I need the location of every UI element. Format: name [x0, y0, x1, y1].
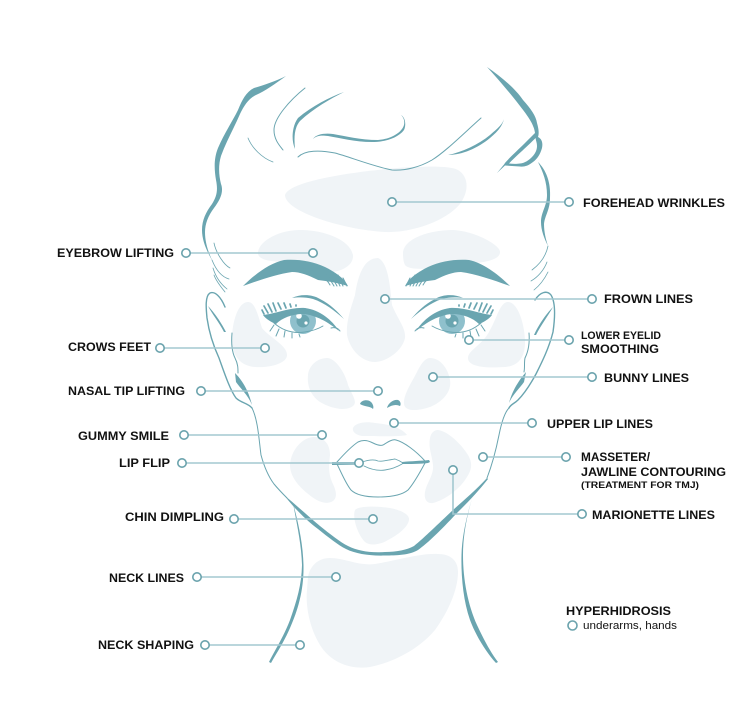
leader: crows feet: [156, 344, 269, 352]
leader: frown lines: [381, 295, 596, 303]
label: upper lip lines: UPPER LIP LINES: [547, 417, 653, 431]
icon: hyperhidrosis dot: [568, 621, 577, 630]
leader: bunny lines: [429, 373, 596, 381]
leader: eyebrow lifting: [182, 249, 317, 257]
label: forehead wrinkles: FOREHEAD WRINKLES: [583, 196, 725, 210]
label: neck lines: NECK LINES: [109, 571, 184, 585]
left neck: [269, 503, 304, 663]
label: masseter jawline contouring: [581, 450, 726, 491]
leader: marionette lines: [449, 466, 586, 518]
hair and head outline: [202, 67, 550, 292]
leader: gummy smile: [180, 431, 326, 439]
label: hyperhidrosis: HYPERHIDROSIS: [566, 604, 671, 618]
left ear: [206, 293, 252, 408]
leader: neck shaping: [201, 641, 304, 649]
patch: right lower cheek: [425, 430, 471, 503]
iris: [439, 308, 465, 334]
label: bunny lines: BUNNY LINES: [604, 371, 689, 385]
leader: masseter: [479, 453, 570, 461]
label: masseter jawline contouring: JAWLINE CONTOURING: [581, 465, 726, 479]
face outline: [206, 292, 555, 663]
label: underarms, hands: underarms, hands: [583, 620, 678, 632]
left eye: [262, 295, 344, 338]
label: eyebrow lifting: EYEBROW LIFTING: [57, 246, 174, 260]
leader: lip flip: [178, 459, 363, 467]
eyelids and lashes: [411, 295, 493, 338]
nostrils: [360, 400, 401, 409]
label: marionette lines: MARIONETTE LINES: [592, 508, 715, 522]
leader: chin dimpling: [230, 515, 377, 523]
leader: neck lines: [193, 573, 340, 581]
leader: forehead wrinkles: [388, 198, 573, 206]
label: masseter jawline contouring: (TREATMENT FOR TMJ): [581, 480, 699, 491]
right eyebrow: [405, 260, 510, 286]
leader: nasal tip lifting: [197, 387, 382, 395]
label: chin dimpling: CHIN DIMPLING: [125, 510, 224, 524]
leader: lower eyelid: [465, 336, 573, 344]
patch: right nasal: [404, 358, 450, 410]
label: lower eyelid smoothing: SMOOTHING: [581, 342, 659, 356]
label: lower eyelid smoothing: LOWER EYELID: [581, 330, 661, 342]
label: gummy smile: GUMMY SMILE: [78, 429, 169, 443]
left eyebrow: [243, 260, 348, 286]
patch: left brow: [258, 230, 353, 272]
patch: right crow's feet: [468, 302, 525, 367]
eyelids and lashes: [262, 295, 344, 338]
treatment area patches: [232, 167, 525, 668]
leader: upper lip lines: [390, 419, 536, 427]
patch: forehead: [285, 167, 467, 232]
label: neck shaping: NECK SHAPING: [98, 638, 194, 652]
label: lip flip: LIP FLIP: [119, 456, 170, 470]
patch: neck: [307, 554, 458, 668]
hair: right side: [538, 162, 550, 246]
iris: [290, 308, 316, 334]
patch: left nasal: [308, 358, 355, 409]
left ear inner: [208, 306, 226, 332]
patch: upper lip: [353, 422, 407, 436]
hair strands: [248, 88, 504, 170]
right neck: [461, 495, 498, 663]
jaw outline: [252, 408, 287, 498]
lips: [332, 440, 430, 497]
sideburn strokes: [212, 243, 548, 292]
patch: chin: [354, 507, 409, 544]
patch: right brow: [403, 230, 500, 269]
label: frown lines: FROWN LINES: [604, 292, 693, 306]
patch: left crow's feet: [232, 302, 287, 367]
patch: left lower cheek: [290, 437, 336, 503]
right ear: [509, 292, 555, 408]
label: nasal tip lifting: NASAL TIP LIFTING: [68, 384, 185, 398]
label: crows feet: CROWS FEET: [68, 340, 152, 354]
hair: left outline: [202, 76, 286, 262]
label: lower eyelid smoothing: [581, 330, 661, 356]
right eye: [411, 295, 493, 338]
label: masseter jawline contouring: MASSETER/: [581, 450, 651, 464]
patch: nose bridge: [347, 258, 405, 362]
right ear inner: [534, 307, 553, 335]
hair: right swoop: [487, 67, 542, 173]
